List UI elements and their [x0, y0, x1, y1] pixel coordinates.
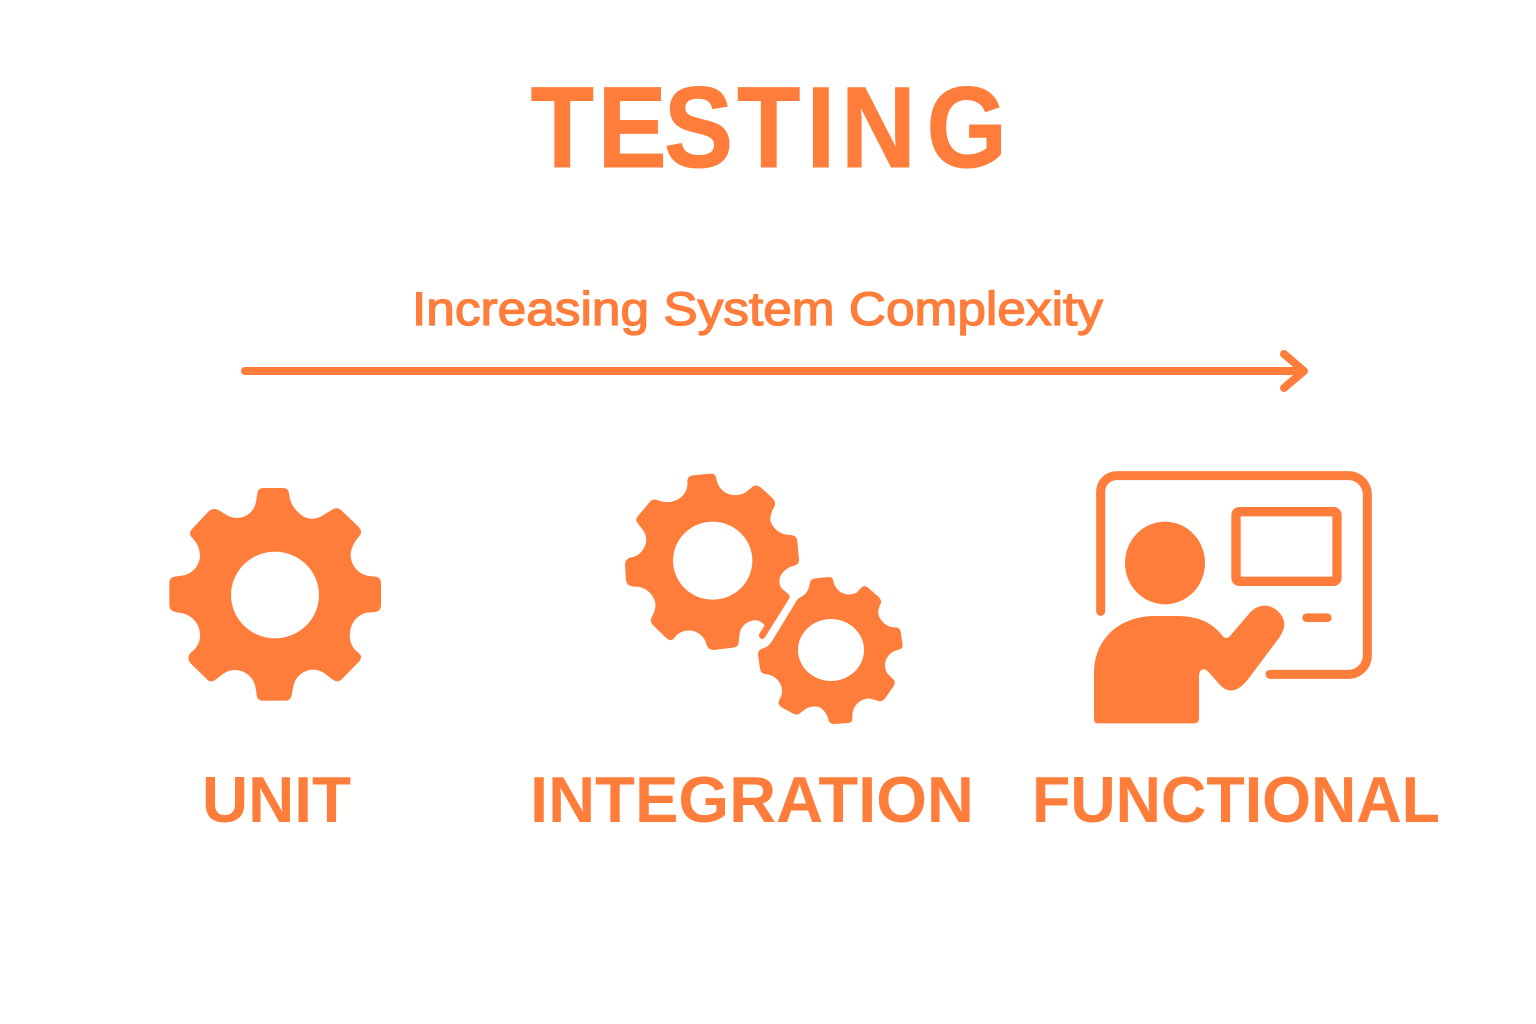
label: integration: INTEGRATION — [530, 763, 974, 836]
arrow — [245, 354, 1304, 388]
label: functional: FUNCTIONAL — [1032, 763, 1440, 836]
icon: person presenting at a board (functional) — [1094, 476, 1367, 723]
dash — [1307, 605, 1327, 631]
subtitle: increasing system complexity: Increasing System Complexity — [412, 282, 1104, 335]
title: TESTING — [531, 64, 1007, 192]
label: unit: UNIT — [202, 763, 351, 836]
screen — [1236, 512, 1337, 581]
body and raised arm — [1094, 606, 1284, 723]
small gear — [758, 577, 903, 724]
large gear — [625, 474, 799, 650]
icon: two meshing gears (integration) — [625, 474, 903, 724]
board frame — [1101, 476, 1367, 674]
icon: single gear (unit) — [169, 488, 381, 701]
head — [1125, 522, 1205, 604]
